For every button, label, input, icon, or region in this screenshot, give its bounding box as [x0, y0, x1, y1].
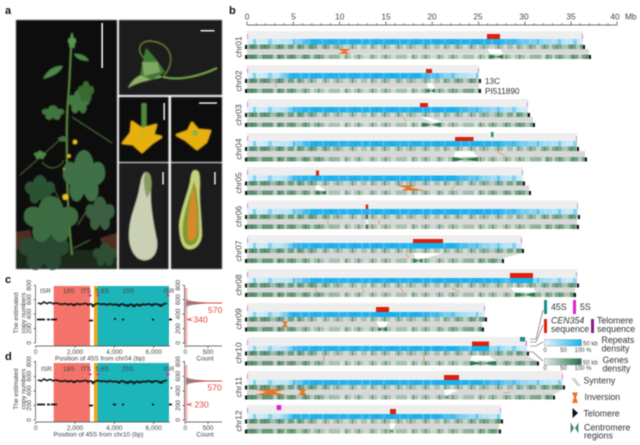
genome scale axis: Mb: [625, 12, 637, 22]
chromosome chr04: [234, 132, 587, 162]
chromosome chr06: [234, 200, 580, 229]
chromosome chr07: chr07: [234, 240, 244, 262]
panel d: count histogram: 800: [175, 356, 182, 367]
panel d: copy number plot: 2,000: [67, 425, 84, 432]
chromosome chr10: chr10: [234, 342, 244, 364]
panel c: count histogram: 340: [194, 314, 208, 324]
genome scale axis: 0: [245, 12, 250, 22]
panel d: copy number plot: copy numbers: [20, 368, 28, 409]
panel d: copy number plot: 5.8S: [96, 366, 110, 373]
chromosome chr05: chr05: [234, 172, 244, 194]
scale bar main photo: [101, 23, 103, 68]
legend: 5S: 5S: [580, 302, 591, 312]
chromosome chr12: chr12: [234, 410, 244, 432]
panel d: copy number plot: 200: [26, 400, 33, 411]
label PI511890: PI511890: [485, 87, 520, 96]
legend: 45S: 45S: [551, 302, 567, 312]
panel c: copy number plot: Position of 45S from chr04 (bp): [55, 356, 145, 362]
genome scale axis: 10: [335, 12, 345, 22]
legend: telomere sequence: sequence: [597, 324, 635, 334]
panel c: copy number plot: [13, 279, 175, 362]
genome scale axis: 15: [381, 12, 391, 22]
legend: synteny: [571, 376, 616, 386]
panel c: copy number plot: The estimated: [13, 292, 20, 334]
legend: genes density: 50 kb: [583, 360, 598, 366]
legend: CEN354 sequence: [544, 316, 589, 334]
panel c: copy number plot: 200: [26, 323, 33, 334]
chromosome chr03: [234, 99, 535, 127]
chromosome chr01: [234, 31, 591, 59]
chromosome chr10: [234, 337, 539, 366]
panel d: copy number plot: 4,000: [106, 425, 123, 432]
panel c: copy number plot: ITS: [81, 288, 92, 295]
label 13C: 13C: [485, 77, 500, 86]
panel d: count histogram: 500: [203, 425, 214, 432]
chromosome chr03: chr03: [234, 104, 244, 126]
legend: genes density: 0: [543, 366, 547, 372]
panel c: count histogram: Count: [196, 356, 214, 362]
legend: telomere sequence: [591, 316, 635, 334]
panel c: count histogram: 0: [183, 349, 187, 356]
chromosome chr08: chr08: [234, 274, 244, 296]
panel d: count histogram: 0: [183, 425, 187, 432]
chromosome chr06: chr06: [234, 206, 244, 227]
panel c: copy number plot: 400: [26, 308, 33, 320]
panel d: count histogram: 200: [175, 400, 182, 411]
panel d: count histogram: 230: [194, 400, 209, 410]
panel d: count histogram: 0: [175, 418, 182, 422]
panel d: copy number plot: ISR: [41, 366, 52, 373]
panel c: count histogram: 400: [175, 308, 182, 320]
panel d: count histogram: Count: [196, 432, 214, 438]
legend: centromere regions: regions: [584, 430, 613, 440]
legend: repeats density: density: [602, 344, 630, 354]
legend: genes density: Genes: [602, 355, 629, 365]
genome scale axis: 20: [427, 12, 437, 22]
panel c: copy number plot: ISR: [164, 288, 175, 295]
chromosome chr11: chr11: [234, 376, 244, 397]
genome scale axis: 25: [473, 12, 483, 22]
panel c: copy number plot: 5.8S: [96, 288, 110, 295]
scale bar shoot: [200, 30, 214, 32]
panel a: fruit cross-section photo: [171, 163, 222, 269]
panel c: copy number plot: 600: [26, 294, 33, 305]
panel c: count histogram: 800: [175, 279, 182, 291]
panel c: copy number plot: 2,000: [67, 349, 84, 356]
panel c: count histogram: 200: [175, 323, 182, 334]
legend: inversion: Inversion: [584, 392, 620, 402]
scale bar female flower: [199, 102, 217, 104]
legend: synteny: Synteny: [584, 376, 616, 386]
legend: genes density: 50: [560, 366, 567, 372]
scale bar male flower: [163, 103, 165, 120]
panel c: copy number plot: copy numbers: [20, 292, 28, 333]
panel d: copy number plot: 0: [34, 425, 38, 432]
panel a: male flower photo: [119, 97, 168, 162]
legend: centromere regions: Centromere: [584, 422, 631, 432]
chromosome chr02: chr02: [234, 70, 244, 92]
legend: repeats density: Repeats: [602, 335, 635, 345]
panel d: copy number plot: Position of 45S from chr10 (bp): [54, 432, 143, 438]
panel d: copy number plot: The estimated: [13, 368, 20, 410]
legend: centromere regions: [571, 422, 631, 440]
chromosome chr08: [234, 269, 579, 297]
legend leader lines: [527, 310, 543, 361]
panel a: shoot tip photo: [119, 20, 222, 95]
chromosome chr01: chr01: [234, 36, 244, 58]
panel c: count histogram: 570: [208, 305, 222, 315]
legend: genes density: density: [602, 364, 631, 374]
scale bar fruit exterior: [162, 172, 164, 184]
panel c: copy number plot: 18S: [63, 288, 75, 295]
genome scale axis: 40: [610, 12, 620, 22]
panel d: copy number plot: 25S: [122, 366, 134, 373]
panel c: copy number plot: 0: [34, 349, 38, 356]
panel letter d: d: [5, 351, 12, 363]
legend: repeats density: 100 %: [574, 348, 592, 354]
panel letter a: a: [5, 5, 12, 17]
panel a: whole plant photo: [16, 20, 117, 270]
chromosome chr07: [234, 235, 524, 263]
panel d: count histogram: 570: [208, 382, 222, 392]
panel c: copy number plot: 25S: [122, 288, 135, 295]
legend: genes density: 100 %: [574, 366, 592, 372]
chromosome chr09: chr09: [234, 308, 244, 330]
panel d: copy number plot: ISR: [164, 366, 175, 373]
chromosome chr09: [234, 303, 487, 332]
panel c: count histogram: 0: [175, 341, 182, 345]
panel c: copy number plot: ISR: [40, 288, 51, 295]
legend: repeats density: [543, 335, 635, 354]
panel c: count histogram: 600: [175, 294, 182, 305]
panel c: copy number plot: 0: [26, 341, 33, 345]
panel d: copy number plot: 600: [26, 370, 33, 382]
chromosome chr12: [234, 405, 503, 434]
scale bar fruit section: [214, 172, 216, 184]
panel c: copy number plot: 4,000: [106, 349, 123, 356]
genome scale axis: 30: [519, 12, 529, 22]
panel c: count histogram: [175, 279, 224, 362]
panel d: copy number plot: 6,000: [146, 425, 162, 432]
panel a: female flower photo: [171, 97, 222, 162]
panel c: count histogram: 500: [203, 349, 214, 356]
panel letter b: b: [229, 5, 236, 17]
legend: repeats density: 50 kb: [583, 342, 598, 348]
legend: 5S: [573, 300, 591, 314]
legend: telomere: Telomere: [584, 408, 620, 418]
genome scale axis: [245, 12, 637, 25]
panel d: copy number plot: 18S: [63, 366, 75, 373]
panel d: copy number plot: 400: [26, 385, 33, 396]
chromosome chr04: chr04: [234, 138, 244, 160]
legend: telomere sequence: Telomere: [597, 316, 633, 326]
chromosome chr11: [234, 371, 565, 400]
panel d: count histogram: 600: [175, 370, 182, 382]
panel d: copy number plot: [13, 356, 175, 438]
panel d: copy number plot: 800: [26, 356, 33, 367]
legend: 45S: [544, 300, 567, 314]
panel c: copy number plot: 6,000: [146, 349, 162, 356]
legend: repeats density: 0: [543, 348, 547, 354]
panel a: fruit exterior photo: [119, 163, 168, 269]
panel d: copy number plot: 0: [26, 418, 33, 422]
panel c: copy number plot: 800: [26, 279, 33, 291]
legend: inversion: [572, 392, 620, 403]
legend: repeats density: 50: [560, 348, 567, 354]
legend: CEN354 sequence: sequence: [551, 324, 589, 334]
panel d: count histogram: [175, 356, 224, 438]
legend: CEN354 sequence: CEN354: [551, 316, 584, 326]
legend: genes density: [543, 355, 631, 374]
chromosome chr05: [234, 167, 531, 195]
panel d: count histogram: 400: [175, 385, 182, 396]
genome scale axis: 35: [566, 12, 576, 22]
panel letter c: c: [5, 274, 11, 286]
chromosome chr02: [234, 65, 481, 93]
genome scale axis: 5: [291, 12, 296, 22]
panel d: copy number plot: ITS: [81, 366, 92, 373]
